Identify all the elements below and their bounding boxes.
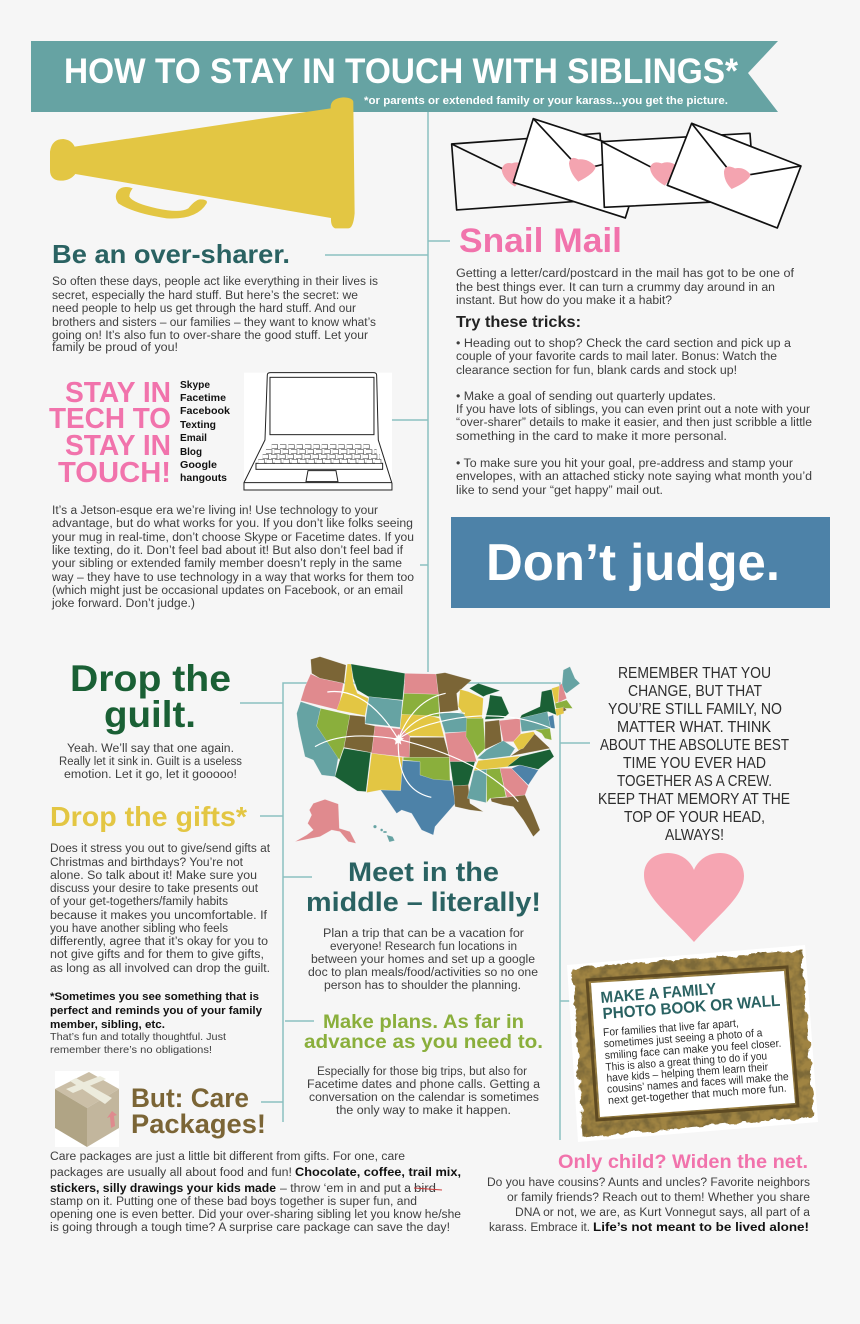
text: only child body: Do you have cousins? Aunts and uncles? Favorite neighbors (487, 1177, 810, 1189)
text: tricks list: envelopes, with an attached sticky note saying what month you’d (456, 471, 812, 483)
text: meet in the middle body: everyone! Research fun locations in (330, 941, 517, 953)
text: remember callout: ALWAYS! (665, 827, 724, 844)
central states (381, 673, 483, 835)
text: tricks list: clearance section for fun, blank cards and stock up! (456, 365, 737, 377)
heading: make plans: Make plans. As far in (323, 1012, 524, 1033)
text: drop the gifts body: discuss your desire to take presents out (50, 883, 259, 895)
heading: meet in the middle: Meet in the (348, 857, 499, 887)
text: care packages body: Chocolate, coffee, trail mix, (295, 1167, 461, 1179)
text: only child body: or family friends? Reach out to them! Whether you share (507, 1192, 810, 1204)
text: only child body: DNA or not, we are, as Kurt Vonnegut says, all part of a (515, 1207, 811, 1219)
text: drop the gifts body: Christmas and birthdays? You’re not (50, 857, 244, 869)
text: over-sharer body: So often these days, people act like everything in their lives is (52, 276, 378, 288)
text: over-sharer body: family be proud of you! (52, 342, 178, 354)
heading: stay in tech: TOUCH! (58, 457, 171, 489)
heading: stay in tech: STAY IN (65, 430, 171, 462)
text: only child body (487, 1177, 811, 1234)
callout: sometimes: remember there’s no obligations! (50, 1044, 212, 1056)
text: meet in the middle body: doc to plan meals/food/activities so no one (308, 967, 538, 979)
callout: sometimes: perfect and reminds you of your family (50, 1005, 263, 1017)
envelope 3 (602, 133, 755, 207)
text: drop the gifts body: not give gifts and for them to give gifts, (50, 949, 264, 961)
text: tricks list: If you have lots of siblings, you can even print out a note with your (456, 404, 810, 416)
list: tech options: Facetime (180, 392, 226, 404)
text: technology body: It’s a Jetson-esque era we’re living in! Use technology to your (52, 505, 378, 517)
text: care packages body: stickers, silly drawings your kids made (50, 1183, 276, 1195)
text: drop the gifts body: Does it stress you out to give/send gifts at (50, 843, 271, 855)
text: technology body: way – they have to use technology in a way that works for them too (51, 572, 414, 584)
icon: envelopes (452, 119, 801, 228)
text: remember callout: ABOUT THE ABSOLUTE BEST (600, 737, 789, 754)
text: care packages body: Care packages are just a little bit different from gifts. For one, care (50, 1151, 405, 1163)
text: drop the gifts body: alone. So talk about it! Make sure you (50, 870, 257, 882)
heading: drop the guilt (70, 658, 231, 735)
list: tech options: Blog (180, 446, 202, 458)
text: over-sharer body (52, 276, 378, 354)
frame border (572, 950, 814, 1137)
text: technology body: like texting, do it. Don’t feel bad about it! But also don’t feel bad if (52, 545, 404, 557)
heading: meet in the middle: middle – literally! (306, 887, 541, 917)
frame text: next get-together that much more fun. (608, 1083, 787, 1107)
envelope 2 (513, 119, 645, 218)
text: over-sharer body: secret, especially the hard stuff. But here’s the secret: we (52, 290, 358, 302)
text: remember callout: YOU’RE STILL FAMILY, NO (608, 701, 782, 718)
text: over-sharer body: going on! It’s also fun to over-share the good stuff. Let your (52, 330, 368, 342)
text: technology body: your mug in real-time, don’t choose Skype or Facetime dates. If you (52, 532, 414, 544)
heading: stay in tech (49, 377, 171, 489)
text: tricks list (456, 338, 812, 497)
text: drop the gifts body: because it makes you uncomfortable. If (50, 910, 268, 922)
list: tech options: Google (180, 459, 217, 471)
frame text (603, 1018, 789, 1107)
hawaii (373, 825, 395, 842)
text: meet in the middle body: Plan a trip that can be a vacation for (323, 928, 524, 940)
subheading: try these tricks: Try these tricks: (456, 314, 581, 331)
heading: snail mail: Snail Mail (459, 222, 622, 260)
text: make plans body: the only way to make it happen. (336, 1105, 511, 1117)
text: care packages body: bird (414, 1183, 436, 1195)
list: tech options: Email (180, 432, 207, 444)
eastern states (458, 667, 580, 837)
text: remember callout (598, 665, 790, 844)
text: make plans body: conversation on the calendar is sometimes (309, 1092, 539, 1104)
text: meet in the middle body: between your homes and set up a google (311, 954, 535, 966)
list: tech options: Texting (180, 419, 216, 431)
text: care packages body: stamp on it. Putting one of these bad boys together is super fun, and (50, 1196, 417, 1208)
frame text: smiling face can make you feel closer. (604, 1038, 782, 1062)
text: tricks list: • To make sure you hit your goal, pre-address and stamp your (456, 458, 793, 470)
text: technology body: your sibling or extended family member doesn’t reply in the same (52, 558, 402, 570)
text: remember callout: TOGETHER AS A CREW. (617, 773, 772, 790)
text: remember callout: TIME YOU EVER HAD (623, 755, 766, 772)
frame heading: MAKE A FAMILY (600, 981, 717, 1007)
frame text: sometimes just seeing a photo of a (603, 1027, 764, 1050)
heading: meet in the middle (306, 857, 541, 917)
banner subtitle: *or parents or extended family or your karass...you get the picture. (364, 95, 728, 107)
text: technology body (51, 505, 414, 610)
heading: stay in tech: STAY IN (65, 377, 171, 409)
text: technology body: (which might just be occasional updates on Facebook, or an email (52, 585, 403, 597)
text: make plans body: Facetime dates and phone calls. Getting a (307, 1079, 541, 1091)
heading: drop the gifts: Drop the gifts* (50, 801, 247, 832)
text: meet in the middle body (308, 928, 538, 992)
map: united states (295, 657, 580, 843)
text: only child body: Life’s not meant to be lived alone! (593, 1222, 809, 1234)
text: drop the guilt body (59, 743, 242, 781)
text: care packages body: is going through a tough time? A surprise care package can save the day! (50, 1222, 450, 1234)
icon: laptop (244, 373, 392, 491)
heading: stay in tech: TECH TO (49, 403, 171, 435)
text: tricks list: • Make a goal of sending out quarterly updates. (456, 391, 716, 403)
text: remember callout: MATTER WHAT. THINK (617, 719, 771, 736)
text: drop the gifts body: as long as all involved can drop the guilt. (50, 963, 270, 975)
text: drop the guilt body: emotion. Let it go, let it gooooo! (64, 769, 237, 781)
text: only child body: karass. Embrace it. (489, 1222, 590, 1234)
text: remember callout: REMEMBER THAT YOU (618, 665, 771, 682)
frame text: For families that live far apart, (603, 1018, 739, 1039)
text: drop the gifts body: differently, agree that it’s okay for you to (50, 936, 268, 948)
heading: make plans: advance as you need to. (304, 1032, 543, 1053)
panel: picture frame (567, 945, 818, 1142)
heading: but care packages: Packages! (131, 1109, 266, 1139)
heading: but care packages: But: Care (131, 1083, 249, 1113)
text: over-sharer body: need people to help us get through the hard stuff. And our (52, 303, 356, 315)
text: tricks list: • Heading out to shop? Check the card section and pick up a (456, 338, 792, 350)
text: drop the guilt body: Really let it sink in. Guilt is a useless (59, 756, 242, 768)
text: drop the gifts body: you have another sibling who feels (50, 923, 228, 935)
callout: sometimes: That’s fun and totally thoughtful. Just (50, 1031, 226, 1043)
text: care packages body: opening one is even better. Did your over-sharing sibling let you know he/she (50, 1209, 461, 1221)
envelope 4 (667, 123, 801, 228)
text: tricks list: “over-sharer” details to make it easier, and then just scribble a little (456, 417, 812, 429)
text: drop the gifts body (50, 843, 271, 975)
text: tricks list: like to send your “get happy” mail out. (456, 485, 663, 497)
list: tech options: Facebook (180, 405, 230, 417)
travel arcs (315, 692, 553, 802)
heading: don't judge: Don’t judge. (486, 534, 780, 592)
alaska (295, 799, 356, 843)
frame heading: PHOTO BOOK OR WALL (602, 993, 781, 1023)
heading: be an over-sharer: Be an over-sharer. (52, 239, 290, 269)
frame text: This is also a great thing to do if you (605, 1050, 768, 1074)
heading: only child: Only child? Widen the net. (558, 1152, 808, 1173)
text: snail mail intro: the best things ever. It can turn a crummy day around in an (456, 282, 775, 294)
text: snail mail intro: Getting a letter/card/postcard in the mail has got to be one of (456, 268, 795, 280)
panel: don't judge (451, 517, 830, 608)
main title: HOW TO STAY IN TOUCH WITH SIBLINGS* (64, 52, 738, 91)
text: remember callout: TOP OF YOUR HEAD, (624, 809, 765, 826)
frame text: have kids – helping them learn their (606, 1061, 769, 1085)
text: tricks list: couple of your favorite cards to mail later. Bonus: Watch the (456, 351, 777, 363)
west states (297, 657, 410, 793)
callout: sometimes: member, sibling, etc. (50, 1019, 165, 1031)
callout: sometimes (50, 991, 263, 1056)
frame picture area (591, 971, 795, 1117)
text: over-sharer body: brothers and sisters – our families – they want to know what’s (52, 317, 376, 329)
frame text: cousins’ names and faces will make the (607, 1071, 789, 1096)
text: tricks list: something in the card to make it more personal. (456, 431, 727, 443)
callout: sometimes: *Sometimes you see something that is (50, 991, 259, 1003)
list: tech options: Skype (180, 379, 210, 391)
heading: but care packages (131, 1083, 266, 1139)
text: care packages body: packages are usually all about food and fun! (50, 1167, 292, 1179)
icon: heart (644, 853, 744, 942)
heading: make plans (304, 1012, 543, 1053)
list: tech options: hangouts (180, 472, 227, 484)
text: remember callout: KEEP THAT MEMORY AT THE (598, 791, 790, 808)
heading: drop the guilt: Drop the (70, 658, 231, 699)
icon: megaphone (50, 97, 355, 228)
text: technology body: advantage, but do what works for you. If you don’t like folks seeing (52, 518, 413, 530)
text: remember callout: CHANGE, BUT THAT (628, 683, 762, 700)
text: drop the gifts body: of your get-togethers/family habits (50, 896, 228, 908)
text: make plans body: Especially for those big trips, but also for (317, 1066, 527, 1078)
text: drop the guilt body: Yeah. We’ll say that one again. (67, 743, 234, 755)
icon: care package box (55, 1071, 119, 1147)
text: make plans body (307, 1066, 541, 1117)
list: tech options (180, 379, 230, 484)
text: meet in the middle body: person has to shoulder the planning. (324, 980, 521, 992)
heading: drop the guilt: guilt. (104, 694, 196, 735)
envelope 1 (452, 133, 605, 210)
text: snail mail intro: instant. But how do you make it a habit? (456, 295, 672, 307)
title banner (31, 41, 778, 112)
text: snail mail intro (456, 268, 795, 307)
text: care packages body: – throw ‘em in and put a (280, 1183, 412, 1195)
text: care packages body (50, 1151, 461, 1234)
text: technology body: joke forward. Don’t judge.) (51, 598, 195, 610)
